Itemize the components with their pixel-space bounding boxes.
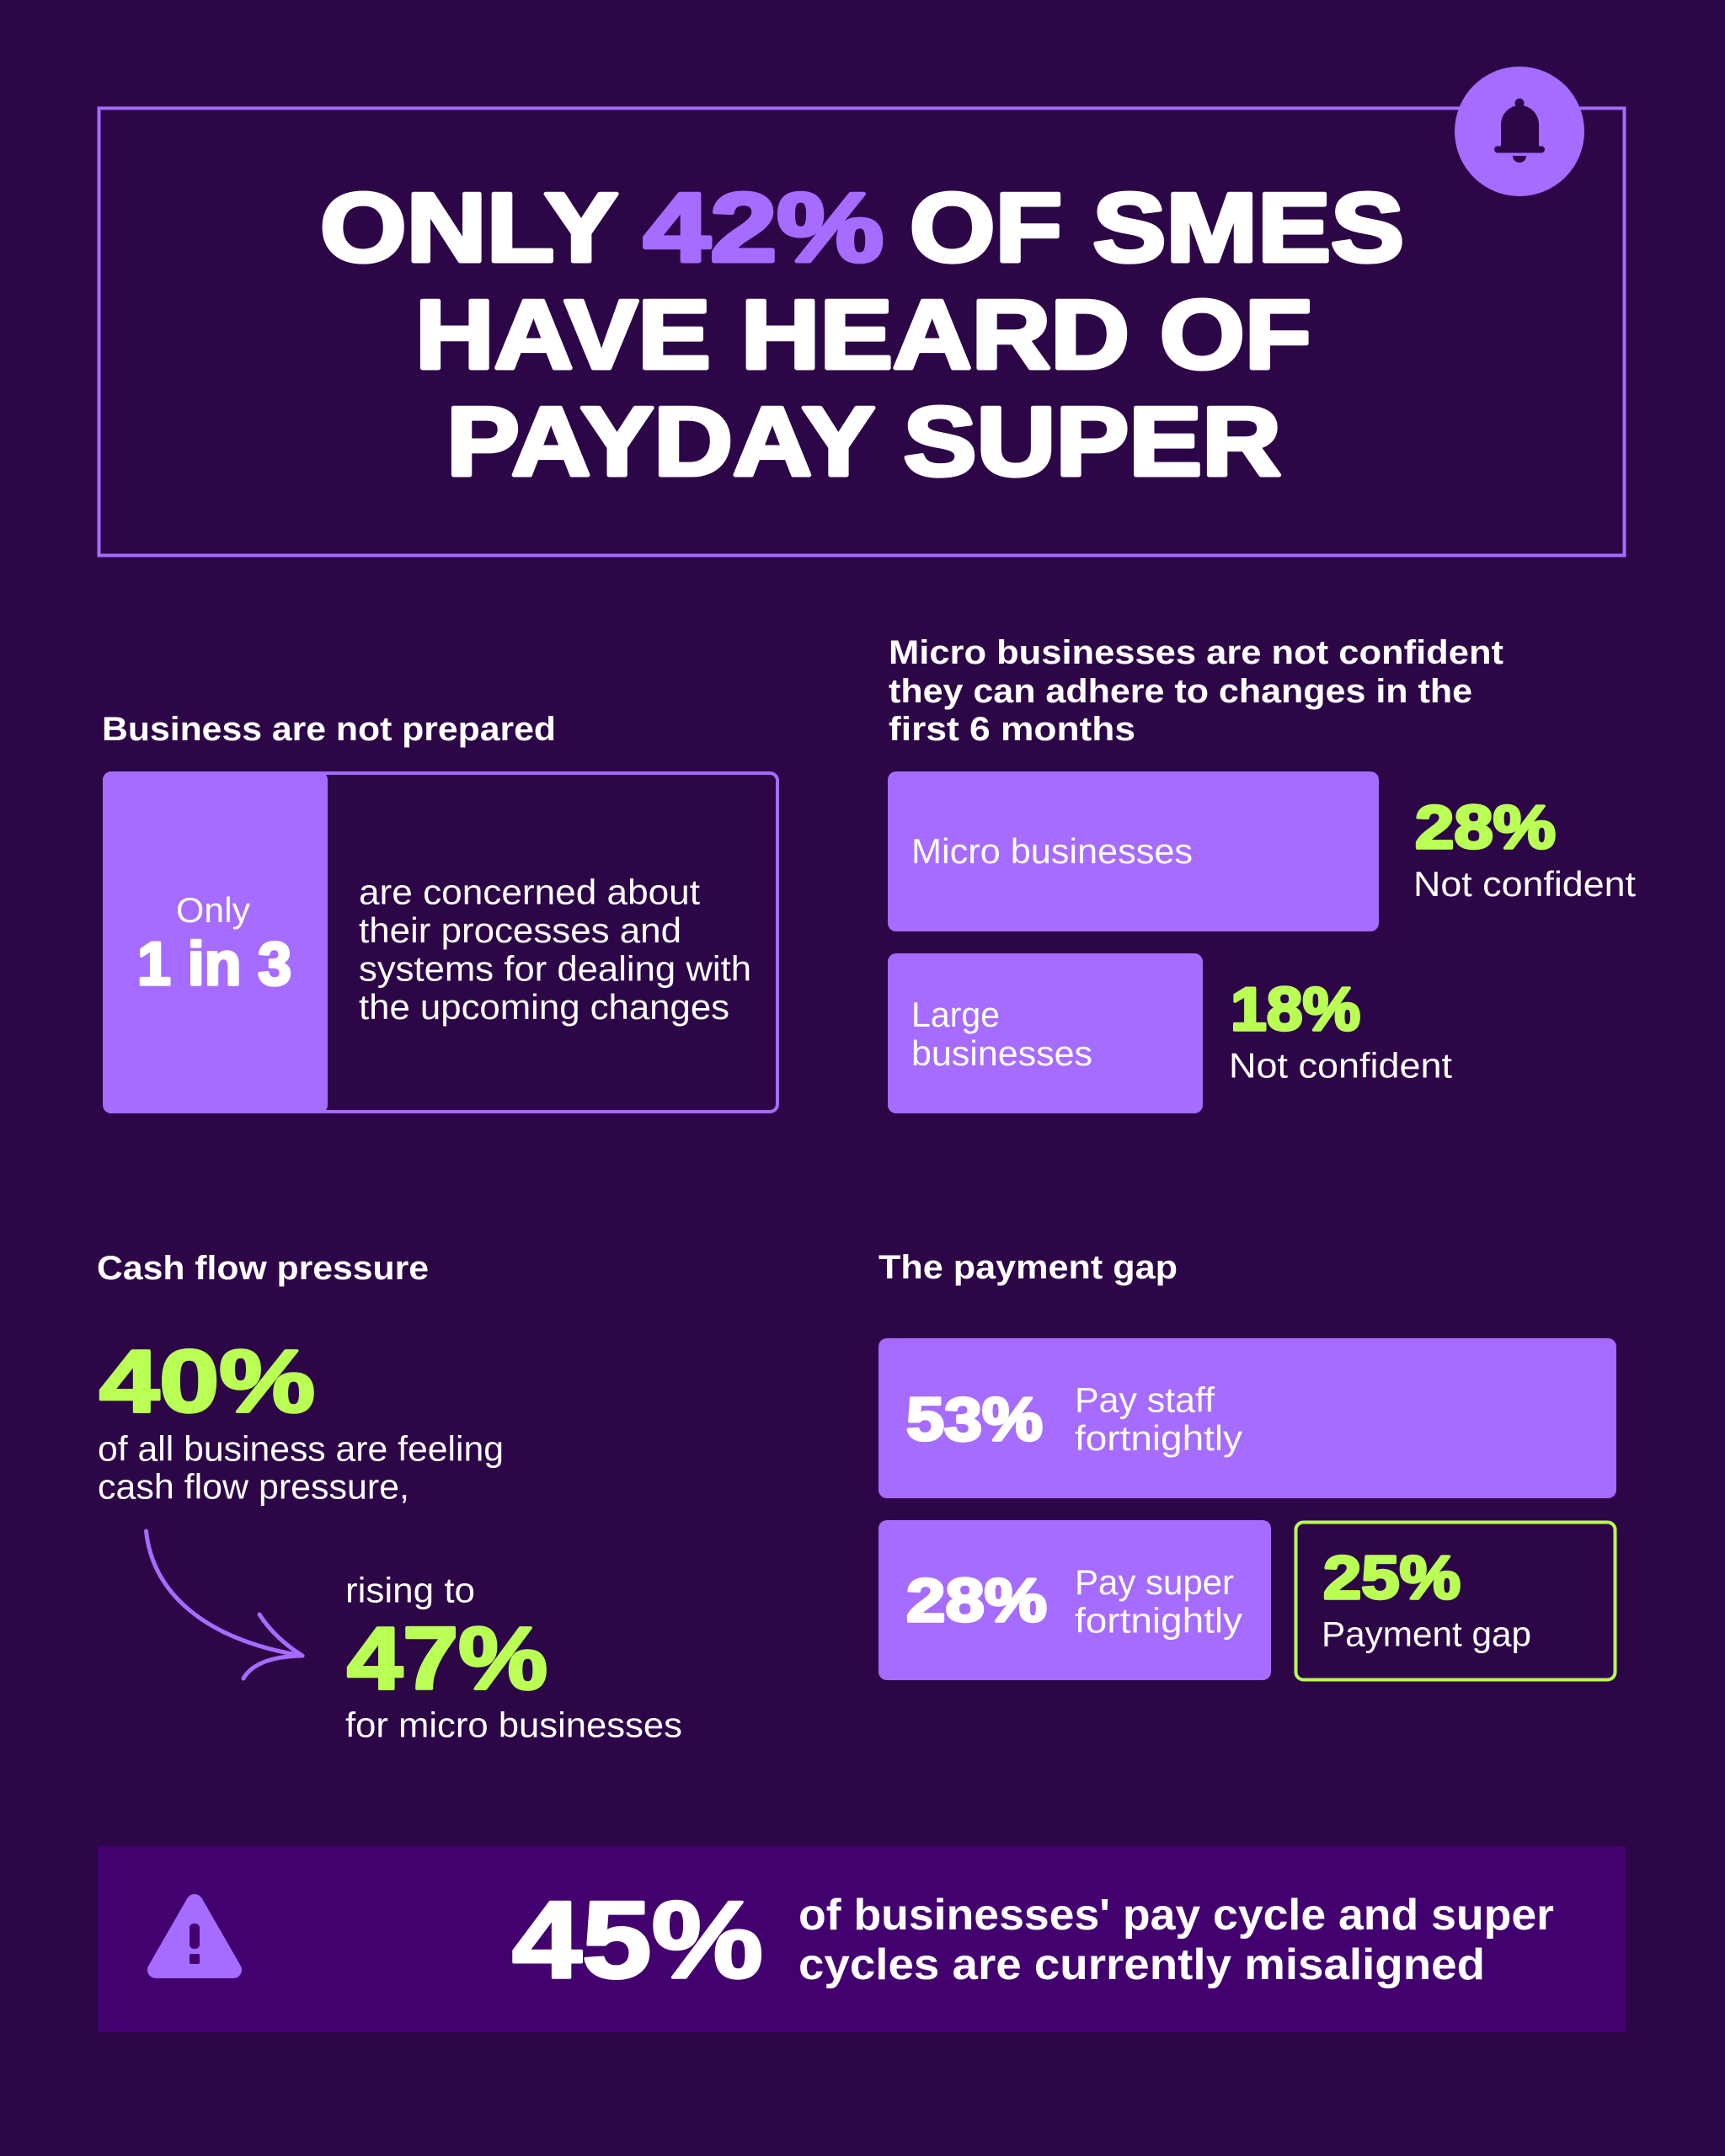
panel: businesses are not prepared: [102, 711, 777, 1113]
title: ONLY: [320, 173, 618, 282]
panel: cash flow pressure: [97, 1250, 682, 1745]
heading: micro businesses are not confident: they can adhere to changes in the: [889, 673, 1472, 710]
stat: 40%: 40%: [99, 1332, 315, 1431]
stat: only 1 in 3: Only: [176, 890, 250, 930]
icon: bell: [1455, 67, 1584, 196]
banner text: of businesses' pay cycle and super: [798, 1891, 1554, 1940]
card body text: [359, 873, 751, 1027]
heading: the payment gap: The payment gap: [879, 1249, 1178, 1286]
title: [320, 173, 1404, 496]
stat: only 1 in 3: [137, 890, 291, 998]
bar: 53% pay staff fortnightly: fortnightly: [1075, 1418, 1242, 1458]
box: 25% payment gap: [1295, 1523, 1616, 1679]
bar: micro businesses: Micro businesses: [911, 831, 1193, 871]
stat: 45%: 45%: [512, 1878, 763, 2001]
bar: micro businesses: [888, 771, 1379, 931]
stat: 28% not confident: 28%: [1415, 794, 1556, 862]
card outline: [104, 773, 777, 1112]
title: HAVE HEARD OF: [415, 280, 1311, 389]
card body text: systems for dealing with: [359, 948, 751, 989]
stat: 28% not confident: [1413, 794, 1636, 904]
title panel: [99, 67, 1624, 556]
title: OF SMES: [910, 173, 1404, 282]
title: 42%: [644, 173, 884, 282]
title: PAYDAY SUPER: [446, 387, 1281, 496]
bar: 53% pay staff fortnightly: Pay staff: [1075, 1380, 1215, 1420]
heading: micro businesses are not confident: [889, 634, 1503, 748]
bar: 28% pay super fortnightly: [879, 1520, 1271, 1680]
title frame: [99, 108, 1624, 556]
text: rising to: rising to: [345, 1570, 475, 1610]
arrow: [147, 1531, 302, 1678]
stat: 47%: 47%: [347, 1609, 547, 1708]
banner text: [798, 1891, 1554, 1989]
bar: 28% pay super fortnightly: Pay super: [1075, 1562, 1234, 1602]
heading: micro businesses are not confident: first 6 months: [889, 711, 1135, 748]
box: 25% payment gap: Payment gap: [1322, 1614, 1531, 1654]
heading: micro businesses are not confident: Micro businesses are not confident: [889, 634, 1503, 671]
box: 25% payment gap: 25%: [1323, 1545, 1461, 1612]
stat: 18% not confident: 18%: [1231, 976, 1360, 1043]
panel: the payment gap: [879, 1249, 1616, 1680]
banner text: cycles are currently misaligned: [798, 1940, 1485, 1989]
stat: 18% not confident: [1229, 976, 1452, 1085]
banner: misaligned cycles: [98, 1846, 1626, 2032]
bar: 28% pay super fortnightly: fortnightly: [1075, 1600, 1242, 1641]
heading: cash flow pressure: Cash flow pressure: [97, 1250, 429, 1287]
text: of all business: [98, 1428, 504, 1506]
bar: large businesses: Large: [911, 995, 1000, 1034]
banner background: [98, 1846, 1626, 2032]
heading: business are not prepared: Business are not prepared: [102, 711, 556, 748]
card body text: the upcoming changes: [359, 987, 729, 1027]
card body text: are concerned about: [359, 873, 700, 911]
bar: large businesses: [888, 953, 1203, 1113]
bar: large businesses: businesses: [911, 1033, 1092, 1073]
text: for micro businesses: for micro businesses: [345, 1705, 682, 1745]
text: of all business: cash flow pressure,: [98, 1467, 409, 1506]
card body text: their processes and: [359, 910, 681, 950]
icon: warning triangle: [156, 1903, 233, 1970]
bar: 53% pay staff fortnightly: [879, 1338, 1616, 1498]
bar: 28% pay super fortnightly: 28%: [906, 1567, 1047, 1635]
panel: micro businesses confidence: [888, 634, 1636, 1113]
card highlight block: [103, 771, 328, 1113]
stat: only 1 in 3: 1 in 3: [137, 931, 291, 998]
stat: 28% not confident: Not confident: [1413, 864, 1636, 904]
text: of all business: of all business are feeling: [98, 1428, 504, 1469]
stat: 18% not confident: Not confident: [1229, 1046, 1452, 1085]
bar: 53% pay staff fortnightly: 53%: [906, 1386, 1043, 1454]
